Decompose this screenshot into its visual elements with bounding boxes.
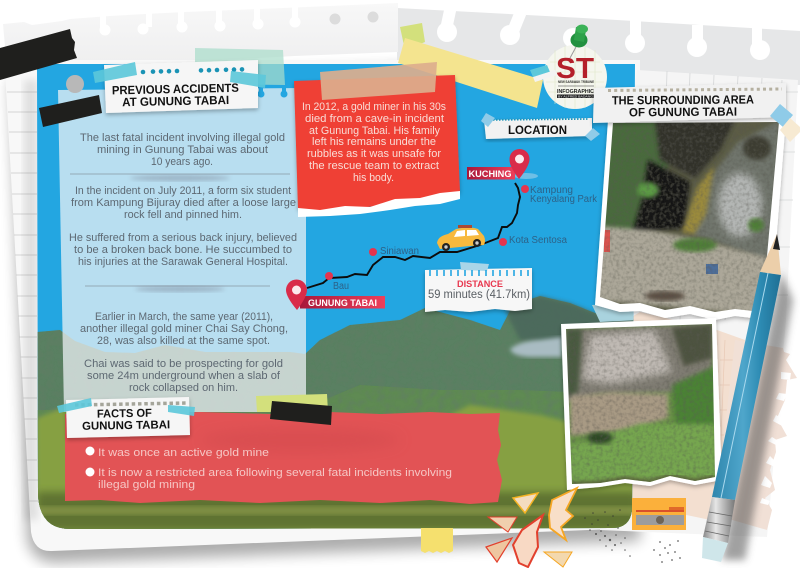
heading: facts of Gunung Tabai: GUNUNG TABAI <box>82 419 170 433</box>
black tape top left <box>0 29 77 80</box>
pale green tape <box>195 48 285 85</box>
graphite dust <box>584 509 681 563</box>
icon: green push pin <box>570 24 588 58</box>
background paper: shadows <box>10 60 640 563</box>
previous accidents text block 2: In the incident on July 2011, a form six student <box>75 185 291 197</box>
torn pink paper strip <box>715 340 797 530</box>
logo: ST infographic badge: INFOGRAPHIC <box>557 89 594 95</box>
heading: previous accidents: AT GUNUNG TABAI <box>122 93 229 109</box>
shaving 2 <box>488 517 517 532</box>
previous accidents text block 4: another illegal gold miner Chai Say Chong, <box>80 323 288 335</box>
white top-left note paper <box>3 3 398 80</box>
lime tape <box>400 23 425 50</box>
shaving 5 <box>513 515 543 567</box>
heading: location <box>481 113 600 141</box>
note text: rubbles as it was unsafe for <box>307 148 441 160</box>
icon: pencil <box>702 234 793 562</box>
beige paper behind lower photo <box>600 312 745 522</box>
red facts panel <box>65 412 502 504</box>
black tape at facts panel <box>270 401 332 425</box>
heading: the surrounding area: THE SURROUNDING AREA <box>612 92 754 107</box>
icon: yellow car <box>437 225 485 251</box>
note text: died from a cave-in incident <box>305 113 444 125</box>
distance card <box>425 262 532 312</box>
left text panel <box>58 88 306 412</box>
photo 2: clearing at Gunung Tabai <box>560 318 722 490</box>
shaving 4 <box>486 538 512 562</box>
bullet 1: It was once an active gold mine <box>98 447 269 459</box>
note text: In 2012, a gold miner in his 30s <box>302 101 447 113</box>
shaving 6 <box>544 552 572 567</box>
heading: facts of Gunung Tabai <box>66 397 190 438</box>
heading: previous accidents: PREVIOUS ACCIDENTS <box>112 81 239 97</box>
Kuching label and pin <box>467 149 538 180</box>
teal tape pieces on heading <box>93 62 266 88</box>
previous accidents text block 4 <box>80 311 288 347</box>
previous accidents text block 1: 10 years ago. <box>151 156 213 168</box>
previous accidents text block 1: The last fatal incident involving illegal gold <box>80 132 285 144</box>
heading: the surrounding area: OF GUNUNG TABAI <box>629 105 737 119</box>
previous accidents text block 5: some 24m underground when a slab of <box>87 370 280 382</box>
black tape on panel <box>39 95 102 127</box>
note text: the rescue team to extract <box>309 160 439 172</box>
previous accidents text block 3 <box>69 232 297 268</box>
previous accidents text block 1: mining in Gunung Tabai was about <box>97 144 268 156</box>
Gunung Tabai label and pin <box>286 280 385 310</box>
shaving 3 <box>549 488 577 540</box>
logo: ST infographic badge: ST <box>556 53 594 85</box>
teal tape on facts heading <box>57 398 195 416</box>
yellow tape at bottom <box>421 528 453 553</box>
previous accidents text block 5: rock collapsed on him. <box>129 382 238 394</box>
bullet 2: It is now a restricted area following several fatal incidents involving <box>98 467 452 479</box>
place: Siniawan: Siniawan <box>380 246 419 257</box>
previous accidents text block 3: his injuries at the Sarawak General Hospital. <box>78 256 288 268</box>
teal tape at logo <box>530 65 557 82</box>
previous accidents text block 4: 28, was also killed at the same spot. <box>97 335 270 347</box>
distance card: 59 minutes (41.7km) <box>428 289 530 301</box>
place: Kampung Kenyalang Park: Kenyalang Park <box>530 194 598 205</box>
icon: sharpener <box>632 498 686 530</box>
previous accidents text block 3: to be a broken back bone. He succumbed to <box>74 244 292 256</box>
note text: his body. <box>353 172 394 184</box>
logo: ST infographic badge <box>543 45 607 109</box>
heading: facts of Gunung Tabai: FACTS OF <box>97 408 152 421</box>
Kuching label and pin: KUCHING <box>468 169 512 179</box>
bullet 2: illegal gold mining <box>98 479 195 491</box>
right graph paper <box>600 70 798 537</box>
place: Bau <box>325 272 349 292</box>
previous accidents text block 5 <box>84 358 283 394</box>
previous accidents text block 4: Earlier in March, the same year (2011), <box>95 311 273 323</box>
logo: ST infographic badge: BY ALFRED BADANG <box>558 94 594 98</box>
heading: location: LOCATION <box>508 123 567 137</box>
place: Bau: Bau <box>333 281 349 292</box>
icon: pencil shavings <box>486 488 577 567</box>
logo: ST infographic badge: NEW SARAWAK TRIBUNE <box>558 80 595 84</box>
cloud <box>510 337 562 357</box>
Gunung Tabai label and pin: GUNUNG TABAI <box>308 298 377 308</box>
note text <box>302 101 447 184</box>
shaving 1 <box>513 493 538 513</box>
previous accidents text block 5: Chai was said to be prospecting for gold <box>84 358 283 370</box>
map route <box>307 183 520 288</box>
heading: previous accidents <box>104 60 258 113</box>
yellow tape <box>398 38 543 108</box>
mountain landscape background photo <box>37 296 640 530</box>
grey top paper with punched holes <box>397 7 800 90</box>
blue punched dots along panel top <box>66 75 288 98</box>
note text: at Gunung Tabai. His family <box>309 125 441 137</box>
distance card: DISTANCE <box>457 279 503 289</box>
map places <box>325 185 598 292</box>
lined note paper at left and bottom <box>5 60 640 551</box>
previous accidents text block 1 <box>80 132 285 168</box>
previous accidents text block 2: from Kampung Bijuray died after a loose large <box>71 197 296 209</box>
place: Kampung Kenyalang Park <box>521 185 598 205</box>
previous accidents text block 2: rock fell and pinned him. <box>124 209 242 221</box>
diamond tape accents around heading <box>770 104 800 142</box>
bullet 2 <box>86 467 452 491</box>
note text: left his remains under the <box>312 136 436 148</box>
photo 1: cave at Gunung Tabai <box>595 118 786 320</box>
brown tape <box>320 62 437 100</box>
previous accidents text block 2 <box>71 185 296 221</box>
red note <box>294 62 460 217</box>
main blue panel <box>37 64 635 529</box>
previous accidents text block 3: He suffered from a serious back injury, believed <box>69 232 297 244</box>
heading: the surrounding area <box>593 83 786 123</box>
lime tape at facts panel <box>256 394 328 412</box>
place: Kampung Kenyalang Park: Kampung <box>530 185 573 196</box>
place: Kota Sentosa: Kota Sentosa <box>509 235 567 246</box>
